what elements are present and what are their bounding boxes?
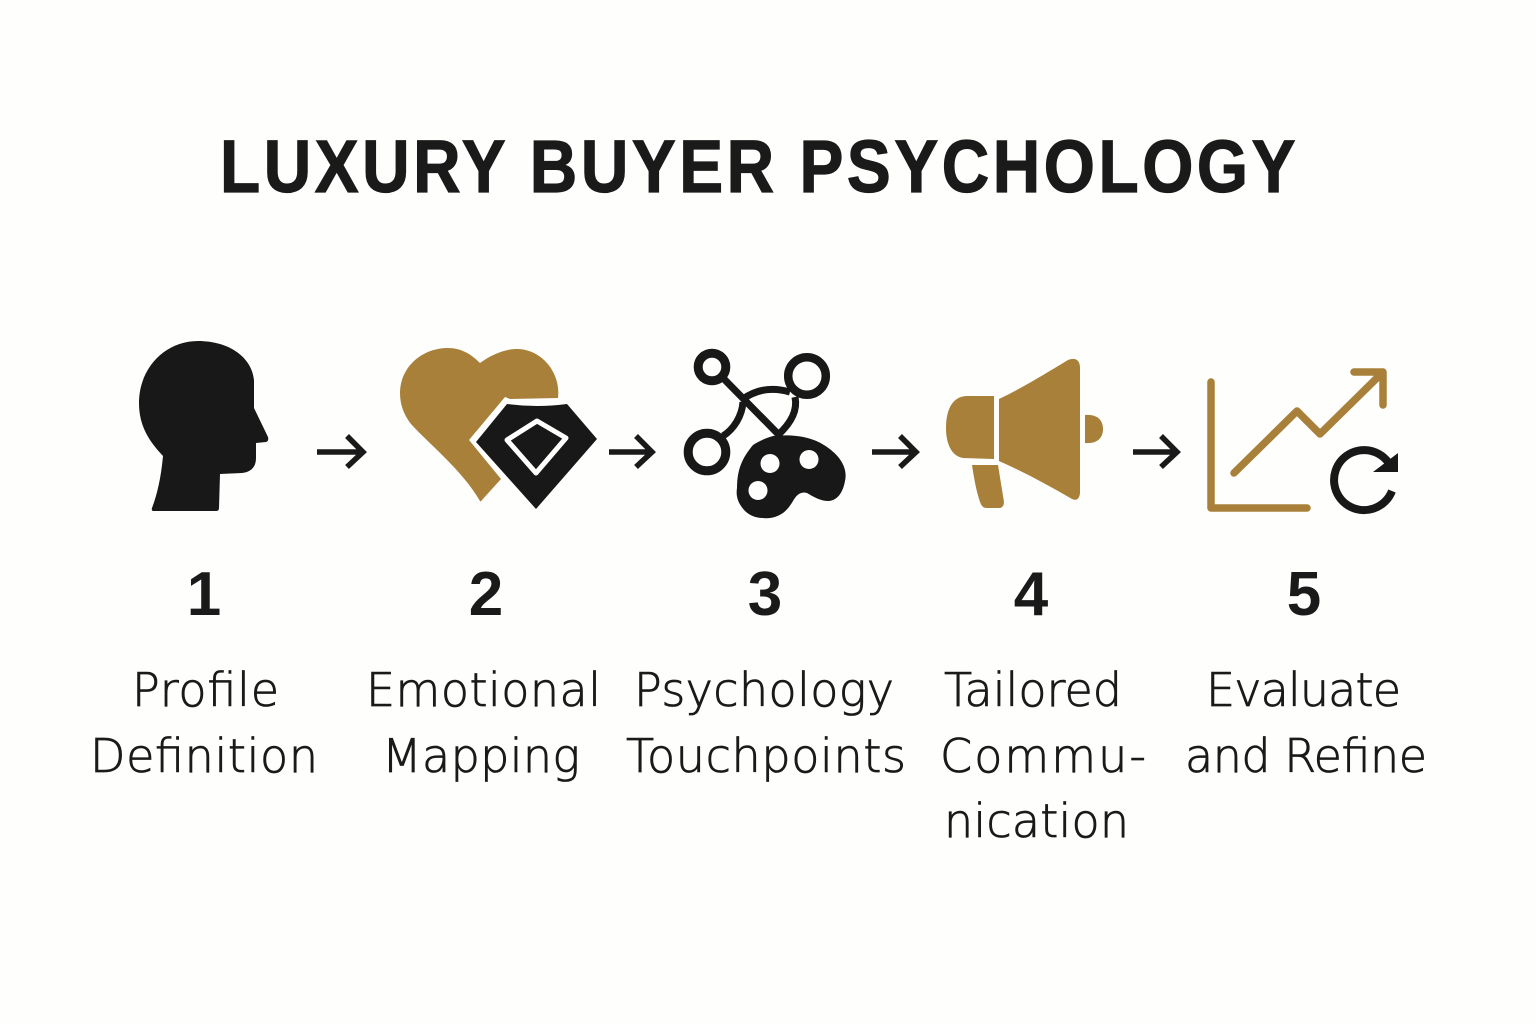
label: evaluate and refine [1185, 663, 1427, 783]
label: tailored communication [940, 663, 1146, 848]
label: profile definition [90, 663, 318, 783]
step 1: profile definition [90, 341, 318, 783]
arrow 4 to 5 [1133, 436, 1177, 467]
label: emotional mapping: Mapping [382, 729, 580, 783]
title: LUXURY BUYER PSYCHOLOGY [220, 125, 1299, 208]
label: evaluate and refine: Evaluate [1206, 663, 1401, 717]
step 2: emotional mapping [366, 348, 601, 783]
label: tailored communication: Tailored [944, 663, 1122, 717]
step number 5: 5 [1287, 560, 1321, 629]
icon: megaphone [946, 359, 1103, 508]
label: tailored communication: Commu- [940, 729, 1146, 783]
icon: heart with diamond [400, 348, 597, 509]
step number 3: 3 [748, 560, 782, 629]
label: psychology touchpoints: Touchpoints [626, 729, 906, 783]
label: psychology touchpoints [626, 663, 906, 783]
step 3: psychology touchpoints [626, 353, 906, 783]
step 4: tailored communication [940, 359, 1146, 848]
arrow 2 to 3 [609, 436, 652, 467]
step number 4: 4 [1014, 560, 1049, 629]
label: profile definition: Profile [132, 663, 279, 717]
arrow 3 to 4 [872, 436, 916, 467]
step number 2: 2 [469, 560, 503, 629]
icon: head silhouette [139, 341, 268, 511]
label: evaluate and refine: and Refine [1185, 729, 1427, 783]
icon: growth chart with refresh [1211, 372, 1398, 510]
step 5: evaluate and refine [1185, 372, 1427, 783]
label: emotional mapping: Emotional [366, 663, 601, 717]
icon: network and palette [688, 353, 846, 518]
label: tailored communication: nication [944, 794, 1129, 848]
arrow 1 to 2 [317, 436, 363, 467]
label: profile definition: Definition [90, 729, 318, 783]
label: psychology touchpoints: Psychology [634, 663, 894, 717]
step number 1: 1 [187, 560, 221, 629]
label: emotional mapping [366, 663, 601, 783]
